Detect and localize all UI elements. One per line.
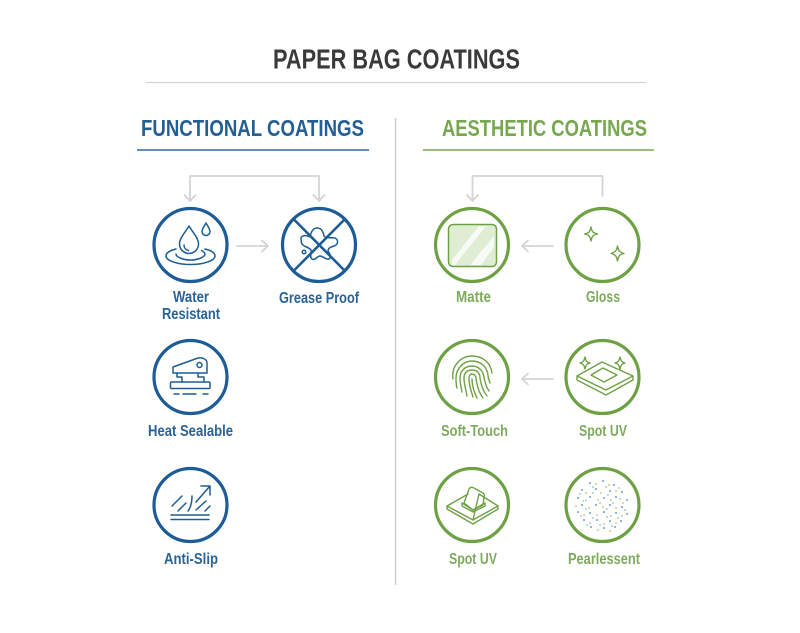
icon: heat sealer [154,340,227,414]
icon: water drop [154,208,227,282]
arrow: bracket gloss to matte [467,176,602,201]
icon: fingerprint [436,340,508,414]
panel: functional coatings [137,115,369,568]
label: soft-touch: Soft-Touch [441,423,508,440]
label: pearlescent: Pearlessent [568,551,640,568]
icon: gloss sparkles [566,208,639,282]
label: spot uv 2: Spot UV [449,551,498,568]
heading: aesthetic coatings: AESTHETIC COATINGS [442,115,647,141]
icon: matte [436,208,508,282]
label: anti-slip: Anti-Slip [164,551,218,568]
arrow: water to grease [237,240,268,252]
heading: functional coatings: FUNCTIONAL COATINGS [141,115,364,141]
icon: grease proof [282,208,356,282]
arrow: gloss to matte [522,240,553,252]
icon: pearlescent dots [566,468,639,542]
icon: anti-slip [154,468,227,542]
label: gloss: Gloss [586,289,620,306]
label: grease proof: Grease Proof [279,290,360,307]
label: water resistant: Water [173,289,209,306]
arrow: spot uv to soft-touch [522,374,553,384]
label: water resistant [162,289,220,323]
title: PAPER BAG COATINGS [273,44,520,74]
label: water resistant: Resistant [162,306,220,323]
icon: spot uv raised [436,468,508,542]
label: heat sealable: Heat Sealable [148,423,233,440]
panel: aesthetic coatings [423,115,654,568]
label: spot uv: Spot UV [579,423,628,440]
arrow: bracket water resistant and grease proof [184,176,324,201]
icon: spot uv sparkles [566,340,639,414]
label: matte: Matte [456,289,491,306]
